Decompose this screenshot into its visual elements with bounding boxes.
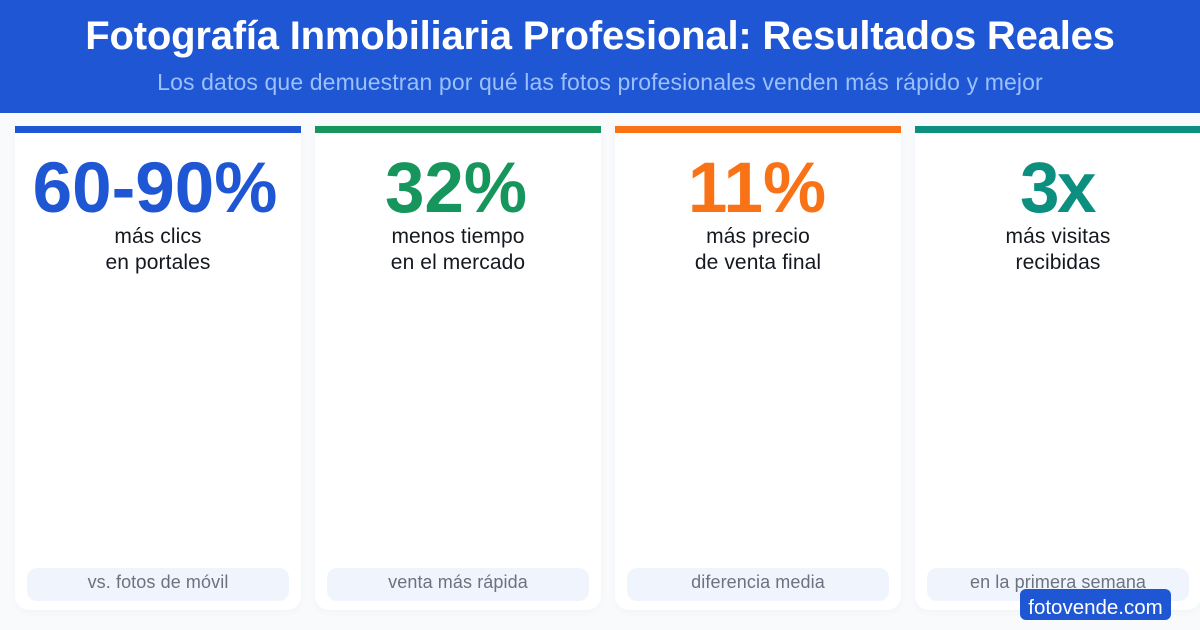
watermark badge: fotovende.com	[1028, 596, 1163, 619]
label: más precio de venta final	[695, 225, 821, 274]
accent bar orange	[615, 126, 901, 133]
label: más precio de venta final: más precio	[706, 225, 810, 248]
note: diferencia media: diferencia media	[691, 572, 825, 592]
stat: 3x: 3x	[1020, 149, 1094, 228]
note: en la primera semana	[927, 568, 1189, 601]
title: Fotografía Inmobiliaria Profesional: Resultados Reales	[85, 14, 1115, 58]
label: menos tiempo en el mercado: menos tiempo	[391, 225, 525, 248]
header band	[0, 0, 1200, 113]
stat: 11%: 11%	[688, 149, 826, 228]
accent bar blue	[15, 126, 301, 133]
note: en la primera semana: en la primera semana	[970, 572, 1146, 592]
panel: más clics	[15, 126, 301, 610]
panel: menos tiempo	[315, 126, 601, 610]
stat: 32%: 32%	[385, 149, 527, 228]
note: vs. fotos de móvil: vs. fotos de móvil	[88, 572, 228, 592]
note: venta más rápida	[327, 568, 589, 601]
note: diferencia media	[627, 568, 889, 601]
label: menos tiempo en el mercado	[391, 225, 525, 274]
label: más visitas recibidas: recibidas	[1016, 251, 1100, 274]
label: menos tiempo en el mercado: en el mercado	[391, 251, 525, 274]
label: más visitas recibidas: más visitas	[1006, 225, 1110, 248]
label: más clics en portales: en portales	[105, 251, 210, 274]
panel: más visitas	[915, 126, 1200, 610]
stat: 60-90%: 60-90%	[33, 149, 277, 228]
watermark badge	[1020, 589, 1171, 620]
note: vs. fotos de móvil	[27, 568, 289, 601]
label: más visitas recibidas	[1006, 225, 1110, 274]
label: más precio de venta final: de venta final	[695, 251, 821, 274]
accent bar teal	[915, 126, 1200, 133]
label: más clics en portales	[105, 225, 210, 274]
panel: más precio	[615, 126, 901, 610]
note: venta más rápida: venta más rápida	[388, 572, 528, 592]
subtitle: Los datos que demuestran por qué las fotos profesionales venden más rápido y mejor	[157, 69, 1043, 95]
label: más clics en portales: más clics	[114, 225, 202, 248]
accent bar green	[315, 126, 601, 133]
